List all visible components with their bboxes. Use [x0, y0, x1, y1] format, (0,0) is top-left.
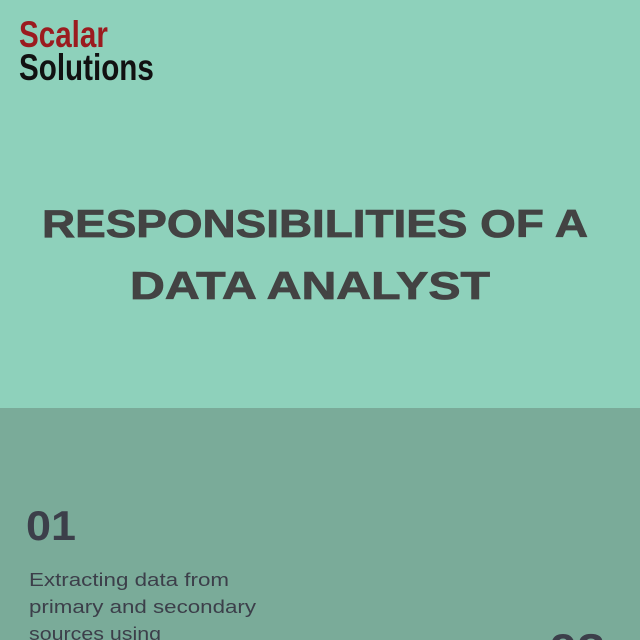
title: RESPONSIBILITIES OF A: [42, 203, 588, 246]
logo: [19, 14, 154, 88]
title: [42, 203, 588, 308]
logo: Scalar: [19, 14, 108, 55]
text block: item 01: Extracting data from: [29, 570, 229, 590]
panel: responsibilities: [0, 408, 640, 640]
title: DATA ANALYST: [130, 265, 490, 308]
number 01: 01: [26, 502, 76, 549]
text block: item 01: [29, 570, 256, 640]
logo: Solutions: [19, 47, 154, 88]
text block: item 01: primary and secondary: [29, 597, 256, 617]
